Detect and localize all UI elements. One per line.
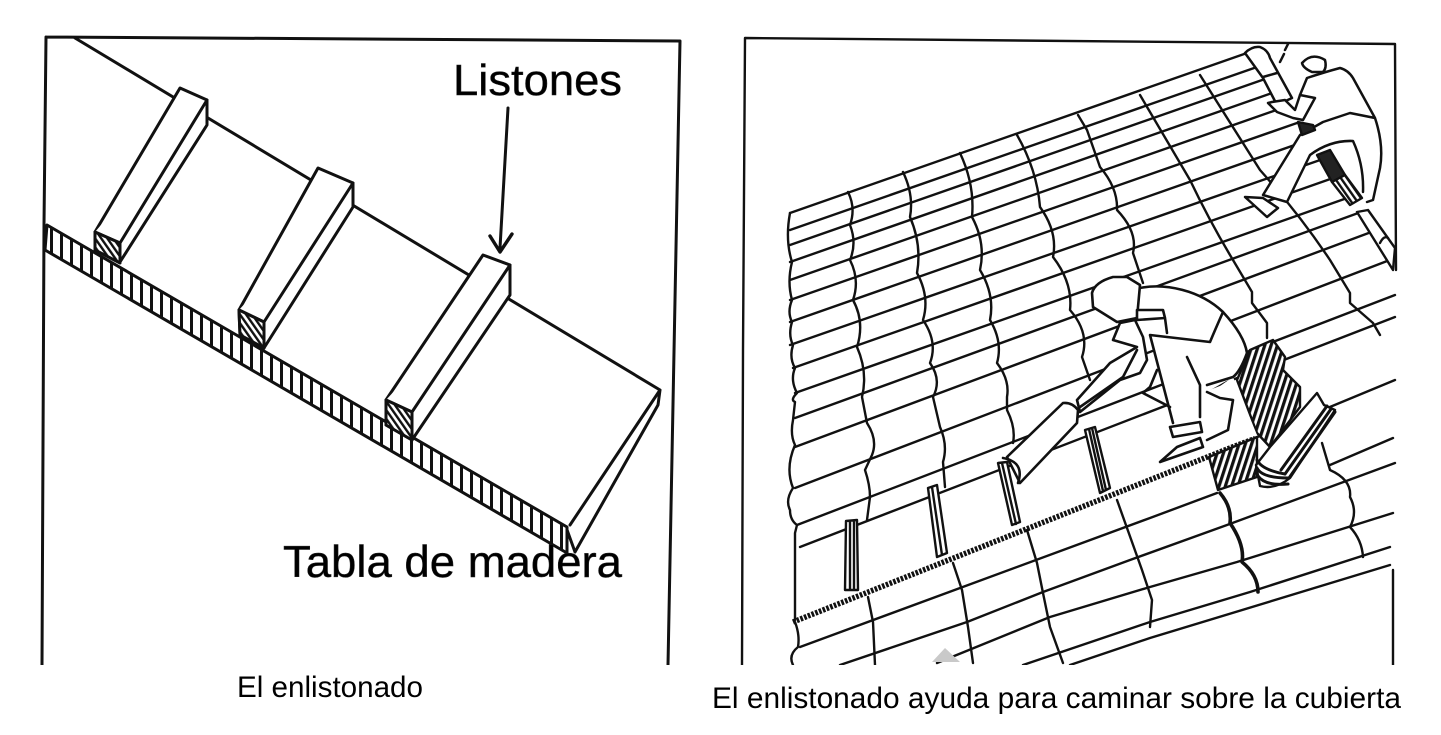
head <box>1302 57 1326 72</box>
body <box>1263 68 1381 202</box>
worker: foreground <box>1003 277 1257 483</box>
board edge hatching <box>45 225 567 553</box>
tile seams <box>788 213 797 620</box>
batten 1 <box>95 88 207 263</box>
tile course lines <box>790 53 1395 547</box>
hole: exposed boards lower <box>1209 437 1257 490</box>
tile carried <box>1245 47 1292 105</box>
arrow: to battens <box>490 108 512 252</box>
back and pants <box>1140 286 1247 440</box>
ridge tiles <box>1356 208 1395 272</box>
batten 3 <box>386 255 510 440</box>
label: Tabla de madera: Tabla de madera <box>283 538 622 587</box>
dashes <box>1280 44 1288 62</box>
eave strip <box>793 438 1255 622</box>
worker: roof top <box>1245 44 1381 217</box>
hole: exposed boards upper <box>1237 340 1300 447</box>
board area under worker <box>1220 378 1257 444</box>
dark ridge hatching <box>1317 150 1362 205</box>
arm <box>1268 95 1315 120</box>
panel: tiled roof with workers <box>742 38 1396 665</box>
battens on eave <box>845 427 1110 590</box>
label: Listones: Listones <box>453 56 622 105</box>
tile held <box>1007 403 1078 483</box>
tile seams below eave <box>791 500 1152 665</box>
caption: left: El enlistonado <box>237 671 423 704</box>
body silhouette <box>1140 288 1246 406</box>
collar <box>1137 310 1167 333</box>
board surface <box>75 38 660 552</box>
arms <box>1077 320 1147 412</box>
panel: wooden board with battens <box>42 37 680 665</box>
smudge <box>932 648 960 662</box>
caption: right: El enlistonado ayuda para caminar sobre la cubierta <box>712 682 1402 715</box>
tile stack <box>1256 393 1335 487</box>
shoes <box>1170 422 1202 437</box>
hood <box>1092 277 1140 322</box>
foot <box>1245 197 1278 217</box>
batten 2 <box>239 168 353 348</box>
